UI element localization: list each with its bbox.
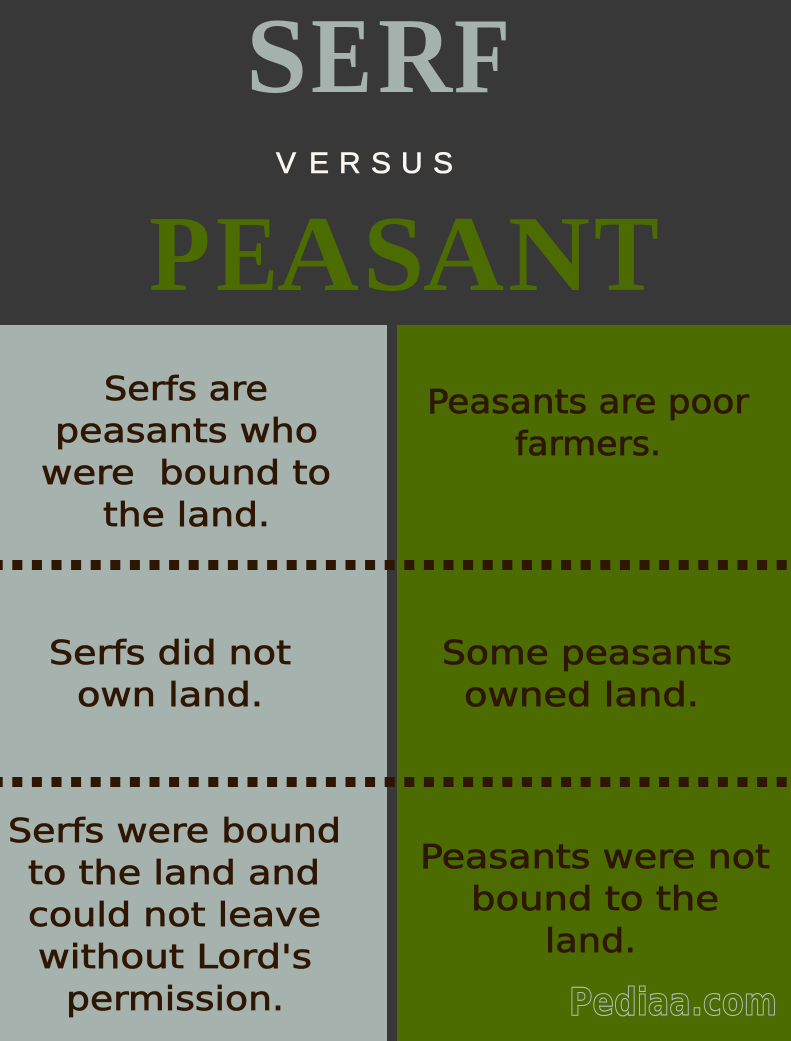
text: serf row 2: [49, 633, 291, 714]
text: peasant row 3: [420, 837, 770, 960]
title: PEASANT: E: [216, 193, 278, 314]
text: peasant row 1: [427, 382, 749, 463]
text: peasant row 2: Some peasants: [442, 633, 732, 672]
text: serf row 3: Serfs were bound: [8, 811, 341, 850]
text: serf row 3: could not leave: [28, 895, 321, 934]
title: PEASANT: P: [149, 194, 210, 314]
text: serf row 1: Serfs are: [104, 369, 268, 408]
text: peasant row 1: farmers.: [515, 424, 661, 463]
divider: dotted row line 1: [0, 560, 791, 570]
title: SERF: [246, 0, 510, 116]
title: PEASANT: A: [423, 194, 504, 314]
text: serf row 3: without Lord's: [38, 937, 312, 976]
panel: serf column: [0, 325, 387, 1041]
text: serf row 3: permission.: [66, 979, 284, 1018]
divider: dotted row line 2: [0, 777, 791, 787]
title: PEASANT: A: [277, 193, 359, 313]
text: peasant row 2: [442, 633, 732, 714]
text: serf row 2: own land.: [77, 675, 263, 714]
title: PEASANT: S: [363, 194, 424, 314]
text: peasant row 3: bound to the: [471, 879, 719, 918]
subtitle: VERSUS: VERSUS: [276, 147, 453, 180]
text: serf row 3: [8, 811, 341, 1018]
text: peasant row 2: owned land.: [464, 675, 699, 714]
text: serf row 3: to the land and: [28, 853, 320, 892]
title: PEASANT: [149, 193, 659, 314]
text: peasant row 1: Peasants are poor: [427, 382, 749, 421]
text: serf row 1: peasants who: [55, 411, 318, 450]
text: peasant row 3: land.: [545, 921, 636, 960]
title: PEASANT: T: [594, 194, 659, 314]
text: serf row 2: Serfs did not: [49, 633, 291, 672]
text: serf row 1: [41, 369, 331, 534]
text: peasant row 3: Peasants were not: [420, 837, 770, 876]
text: serf row 1: were bound to: [41, 453, 331, 492]
title: PEASANT: N: [508, 193, 590, 313]
panel: peasant column: [397, 325, 791, 1041]
text: serf row 1: the land.: [103, 495, 270, 534]
